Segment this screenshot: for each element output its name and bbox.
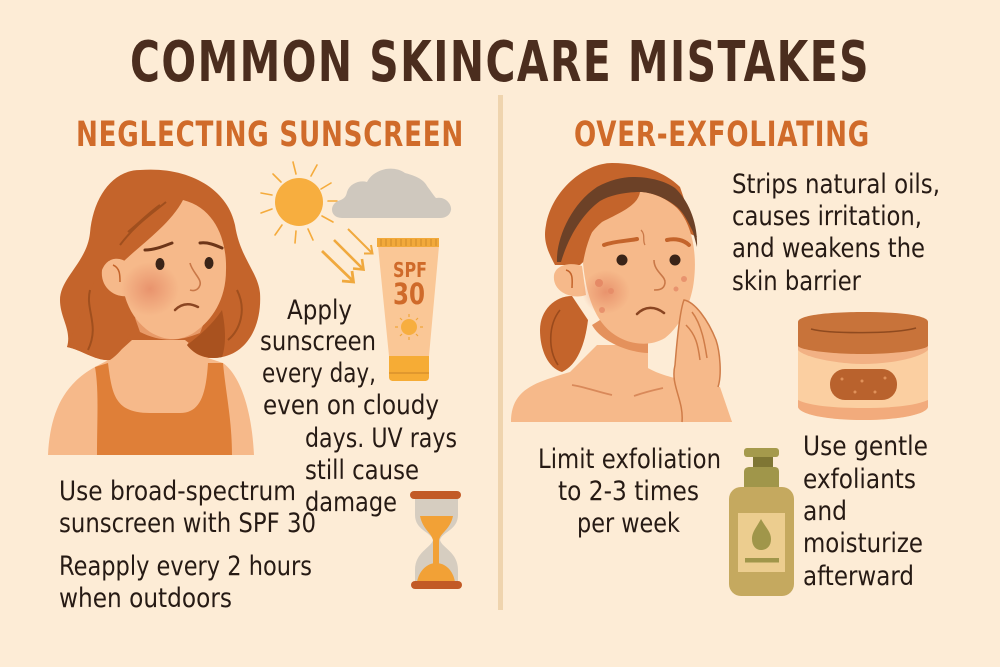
- text: strips natural oils: skin barrier: [732, 266, 861, 297]
- illustration: worried woman with sunburn: [48, 170, 260, 455]
- text: apply sunscreen daily: even on cloudy: [263, 390, 439, 421]
- text: strips natural oils: causes irritation,: [732, 201, 922, 232]
- text: gentle exfoliants: Use gentle: [803, 431, 928, 462]
- icon: SPF 30 sunscreen tube: SPF: [393, 258, 427, 282]
- text: strips natural oils: [732, 169, 940, 297]
- text: broad-spectrum advice: [59, 476, 316, 539]
- text: broad-spectrum advice: Use broad-spectrum: [59, 476, 296, 507]
- icon: SPF 30 sunscreen tube: [377, 238, 439, 381]
- icon: moisturizer pump bottle: [729, 448, 794, 596]
- icon: SPF 30 sunscreen tube: 30: [393, 277, 425, 311]
- text: strips natural oils: and weakens the: [732, 233, 925, 264]
- text: reapply advice: Reapply every 2 hours: [59, 551, 312, 582]
- heading: neglecting sunscreen: NEGLECTING SUNSCREEN: [76, 115, 464, 155]
- text: apply sunscreen daily: sunscreen: [260, 326, 376, 357]
- text: limit exfoliation: [538, 444, 721, 539]
- text: reapply advice: when outdoors: [59, 583, 232, 614]
- text: apply sunscreen daily: [260, 295, 457, 518]
- text: gentle exfoliants: and: [803, 496, 847, 527]
- heading: over-exfoliating: OVER-EXFOLIATING: [574, 115, 870, 155]
- text: strips natural oils: Strips natural oils,: [732, 169, 940, 200]
- panel: neglecting sunscreen: [48, 115, 464, 614]
- icon: exfoliant scrub jar: [798, 312, 928, 420]
- text: broad-spectrum advice: sunscreen with SPF 30: [59, 508, 316, 539]
- text: limit exfoliation: to 2-3 times: [558, 476, 699, 507]
- panel: over-exfoliating: [511, 115, 940, 596]
- icon: sun: [261, 162, 337, 243]
- icon: UV ray arrows: [322, 229, 372, 282]
- text: apply sunscreen daily: damage: [305, 487, 397, 518]
- text: apply sunscreen daily: still cause: [305, 455, 419, 486]
- text: apply sunscreen daily: Apply: [287, 295, 352, 326]
- text: gentle exfoliants: afterward: [803, 561, 914, 592]
- text: apply sunscreen daily: every day,: [262, 358, 376, 389]
- text: limit exfoliation: Limit exfoliation: [538, 444, 721, 475]
- text: apply sunscreen daily: days. UV rays: [305, 423, 457, 454]
- text: limit exfoliation: per week: [577, 508, 681, 539]
- text: gentle exfoliants: moisturize: [803, 528, 923, 559]
- icon: hourglass: [410, 491, 462, 589]
- illustration: woman with irritated skin and headband: [511, 163, 732, 422]
- text: gentle exfoliants: [803, 431, 928, 592]
- text: gentle exfoliants: exfoliants: [803, 464, 916, 495]
- text: reapply advice: [59, 551, 312, 614]
- icon: cloud: [332, 169, 451, 218]
